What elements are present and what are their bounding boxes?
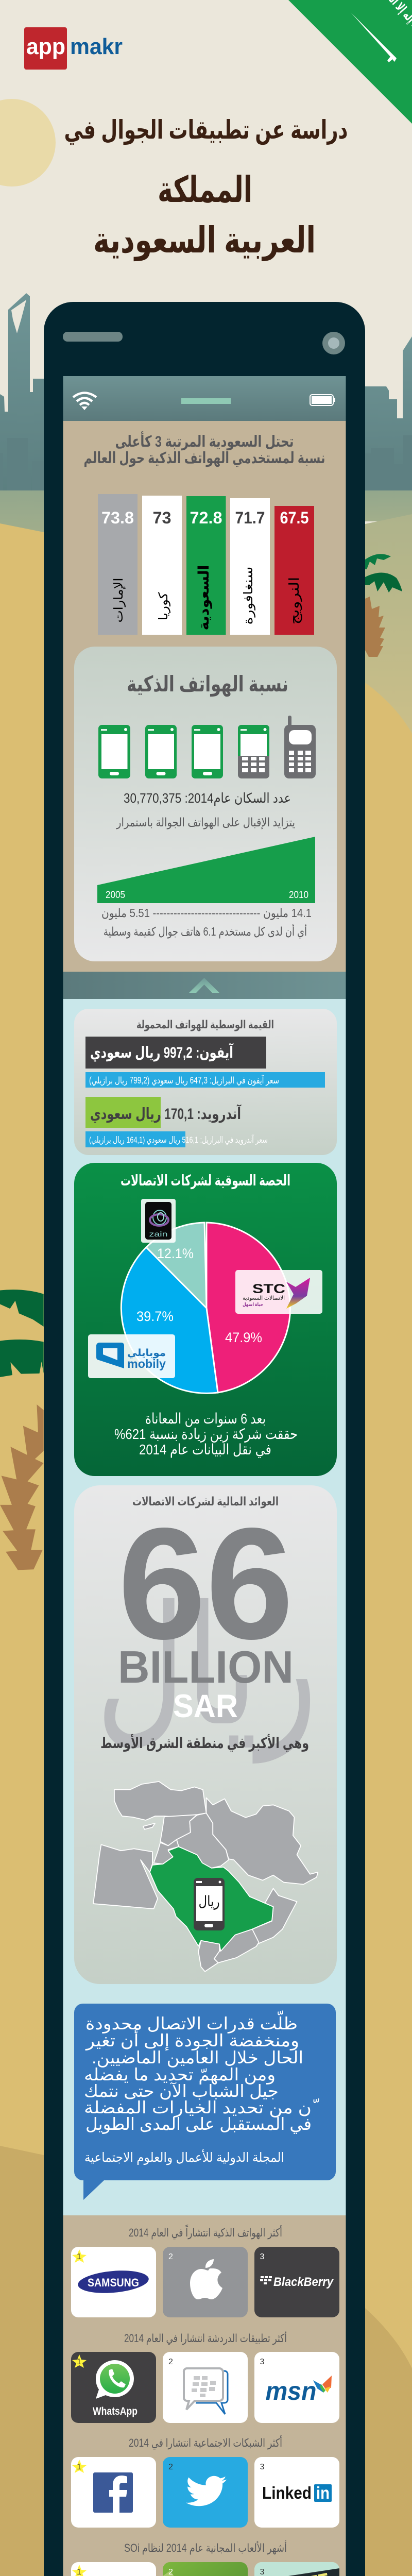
- icon: battery: [310, 395, 335, 405]
- icon: rank star row 2: [72, 2354, 87, 2368]
- iPhone bar: [85, 1037, 266, 1069]
- rank numbers 2 and 3: 2: [168, 2252, 173, 2261]
- rank numbers 2 and 3: 2: [168, 2358, 173, 2366]
- Android Brazil bar: سعر آندرويد في البرازيل: 516,1 ريال سعودي (164,1 ريال برازيلي): [89, 1134, 268, 1145]
- heading: نسبة الهواتف الذكية: [127, 672, 288, 697]
- Android bar: آندرويد: 170,1 ريال سعودي: [90, 1104, 242, 1123]
- notch bar: [181, 398, 231, 404]
- iPhone Brazil bar: سعر آيفون في البرازيل: 647,3 ريال سعودي (799,2 ريال برازيلي): [89, 1074, 279, 1086]
- pie labels: 39.7%: [136, 1309, 174, 1324]
- rank numbers 2 and 3: 2: [168, 2463, 173, 2471]
- callout: quote: في المستقبل على المدى الطويل: [85, 2114, 312, 2134]
- bar chart: smartphone share: [98, 494, 314, 635]
- pie chart: [121, 1223, 290, 1393]
- card: BlackBerry: [254, 2247, 339, 2317]
- screen background sections: [63, 421, 346, 2576]
- rank numbers 2 and 3: 3: [260, 2358, 265, 2366]
- values text: 14.1 مليون ------------------------------- 5.51 مليون: [101, 906, 312, 920]
- phone camera: [322, 332, 345, 354]
- bar chart: smartphone share: 72.8: [190, 509, 222, 527]
- bar chart: smartphone share: 67.5: [280, 509, 309, 527]
- pie labels: [136, 1246, 262, 1345]
- band with chevron: [63, 972, 346, 999]
- card: Twitter: [163, 2457, 248, 2528]
- icon: rank star row 1: [72, 2249, 87, 2263]
- panel: telecom revenue: [74, 1485, 337, 1984]
- panel: market share: [74, 1163, 337, 1476]
- average text: أي أن لدى كل مستخدم 6.1 هاتف جوال كقيمة وسطية: [104, 924, 307, 939]
- map: Middle East: [93, 1782, 318, 1972]
- Zain growth text: في نقل البيانات عام 2014: [139, 1442, 271, 1458]
- bar chart: smartphone share: 71.7: [235, 509, 265, 527]
- title: المملكة: [158, 170, 252, 210]
- card: Facebook: [71, 2457, 156, 2528]
- heading: الحصة السوقية لشركات الاتصالات: [121, 1173, 290, 1189]
- flag corner: [288, 0, 412, 124]
- heading: top smartphones: أكثر الهواتف الذكية انتشاراً في العام 2014: [129, 2224, 282, 2240]
- bar chart: smartphone share: 73: [152, 509, 171, 527]
- subheading: وهي الأكبر في منطقة الشرق الأوسط: [100, 1734, 309, 1752]
- icon: rank star row 3: [72, 2460, 87, 2473]
- rank markers: [72, 2249, 265, 2576]
- logo: STC: الاتصالات السعودية: [243, 1295, 285, 1301]
- population text: عدد السكان عام2014: 30,770,375: [124, 790, 291, 806]
- heading: top chat apps: أكثر تطبيقات الدردشة انتشارا في العام 2014: [124, 2331, 287, 2345]
- pie labels: 47.9%: [225, 1330, 262, 1345]
- card: aa game: [71, 2562, 156, 2576]
- icon: wifi: [73, 393, 96, 410]
- callout: quote: ّن من تحديد الخيارات المفضلة: [84, 2098, 319, 2117]
- BILLION: BILLION: [118, 1641, 294, 1692]
- logo: zain: zain: [149, 1230, 168, 1238]
- logo: mobily: mobily: [127, 1357, 166, 1370]
- icon: sword: [351, 12, 397, 62]
- callout: quote: [74, 2004, 336, 2200]
- iPhone bar: آيفون: 997,2 ريال سعودي: [90, 1043, 234, 1061]
- bar chart: smartphone share: السعودية: [196, 565, 212, 630]
- logo: STC: حياة اسهل: [243, 1302, 263, 1308]
- area chart: 2005-2010: 2005: [106, 890, 125, 901]
- callout: quote: الحال خلال العامين الماضيين.: [92, 2048, 303, 2067]
- card: MMM Fingers: [163, 2562, 248, 2576]
- card: LinkedIn: [254, 2457, 339, 2528]
- heading: top social networks: أكثر الشبكات الاجتماعية انتشارا في 2014: [129, 2435, 282, 2450]
- card: WhatsApp: [71, 2352, 156, 2423]
- heading: Saudi rank: تحتل السعودية المرتبة 3 كأعلى: [115, 431, 294, 450]
- title: [64, 115, 348, 261]
- panel: average phone price: [74, 1009, 337, 1155]
- Zain growth text: بعد 6 سنوات من المعاناة: [145, 1411, 266, 1427]
- iPhone Brazil bar: [85, 1072, 325, 1088]
- card: LinkedIn: Linked: [262, 2483, 312, 2502]
- callout: quote: ومنخفضة الجودة إلى أن تغير: [85, 2029, 299, 2051]
- heading: Saudi rank: [83, 431, 325, 467]
- logo: zain: [141, 1199, 176, 1243]
- icon: rank star row 4: [72, 2565, 87, 2576]
- rank numbers 2 and 3: 3: [260, 2463, 265, 2471]
- area chart: 2005-2010: 2010: [289, 890, 308, 901]
- growth text: يتزايد الإقبال على الهواتف الجوالة باستمرار: [116, 816, 295, 829]
- callout: quote: ومن المهمّ تحديد ما يفضله: [84, 2065, 276, 2084]
- logo: mobily: [88, 1334, 175, 1378]
- logo: mobily: موبايلي: [127, 1348, 166, 1359]
- big number 66: 66: [118, 1495, 294, 1672]
- rank numbers 2 and 3: [168, 2252, 265, 2576]
- title: العربية السعودية: [93, 220, 316, 261]
- status bar: [63, 376, 346, 421]
- callout: quote: جيل الشباب الآن حتى نتمك: [84, 2081, 279, 2100]
- card: BBM: [163, 2352, 248, 2423]
- card: msn: [254, 2352, 339, 2423]
- card: LinkedIn: in: [316, 2483, 330, 2502]
- watermark: riyal: ريال: [96, 1574, 317, 1765]
- icon: rank star row 2: 1: [77, 2358, 81, 2366]
- bar chart: smartphone share: سنغافورة: [242, 566, 255, 625]
- icon: rank star row 1: 1: [77, 2252, 81, 2261]
- card: msn: msn: [266, 2377, 316, 2405]
- rank numbers 2 and 3: 3: [260, 2252, 265, 2261]
- card: BlackBerry: BlackBerry: [273, 2275, 334, 2289]
- Android Brazil bar: [85, 1131, 268, 1147]
- heading: top free iOS games: أشهر الألعاب المجانية عام 2014 لنظام SOi: [124, 2540, 287, 2554]
- icon: rank star row 3: 1: [77, 2463, 81, 2471]
- icon: phone on map: [194, 1878, 225, 1930]
- bar chart: smartphone share: كوريا: [157, 592, 170, 620]
- quote source: المجلة الدولية للأعمال والعلوم الاجتماعية: [84, 2149, 284, 2165]
- logo: appmakr: [24, 27, 123, 70]
- decorative sun circle: [0, 99, 56, 187]
- bar chart: smartphone share: النرويج: [286, 577, 302, 624]
- Android bar: [85, 1097, 242, 1128]
- logo: appmakr: app: [26, 34, 65, 59]
- card: Apple: [163, 2247, 248, 2317]
- heading: Saudi rank: نسبة لمستخدمي الهواتف الذكية حول العالم: [83, 450, 325, 467]
- phone body: [44, 302, 365, 2576]
- Zain growth text: حققت شركة زين زيادة بنسبة 621%: [114, 1426, 298, 1443]
- logo: appmakr: makr: [70, 34, 123, 59]
- card: WhatsApp: WhatsApp: [93, 2405, 138, 2417]
- pie labels: 12.1%: [157, 1246, 194, 1261]
- icon: right palm tree: [365, 554, 402, 657]
- SAR: SAR: [173, 1688, 238, 1724]
- bar chart: smartphone share: الإمارات: [112, 578, 126, 622]
- Zain growth text: [114, 1411, 298, 1458]
- icon: left palm tree: [0, 1290, 44, 1570]
- area chart: 2005-2010: [97, 837, 315, 903]
- phone speaker: [63, 332, 123, 342]
- panel: smartphone share: [74, 647, 337, 961]
- bar chart: smartphone share: 73.8: [101, 509, 134, 527]
- logo: STC: STC: [252, 1282, 285, 1296]
- icon row: phones: [98, 716, 316, 778]
- card: Samsung: SAMSUNG: [88, 2276, 139, 2289]
- card: Samsung: [71, 2247, 156, 2317]
- icon: phone on map: ريال: [199, 1893, 219, 1910]
- callout: quote: ظلّت قدرات الاتصال محدودة: [85, 2011, 298, 2033]
- heading: القيمة الوسطية للهواتف المحمولة: [136, 1018, 274, 1031]
- logo: STC: [235, 1270, 322, 1314]
- heading: العوائد المالية لشركات الاتصالات: [132, 1495, 279, 1509]
